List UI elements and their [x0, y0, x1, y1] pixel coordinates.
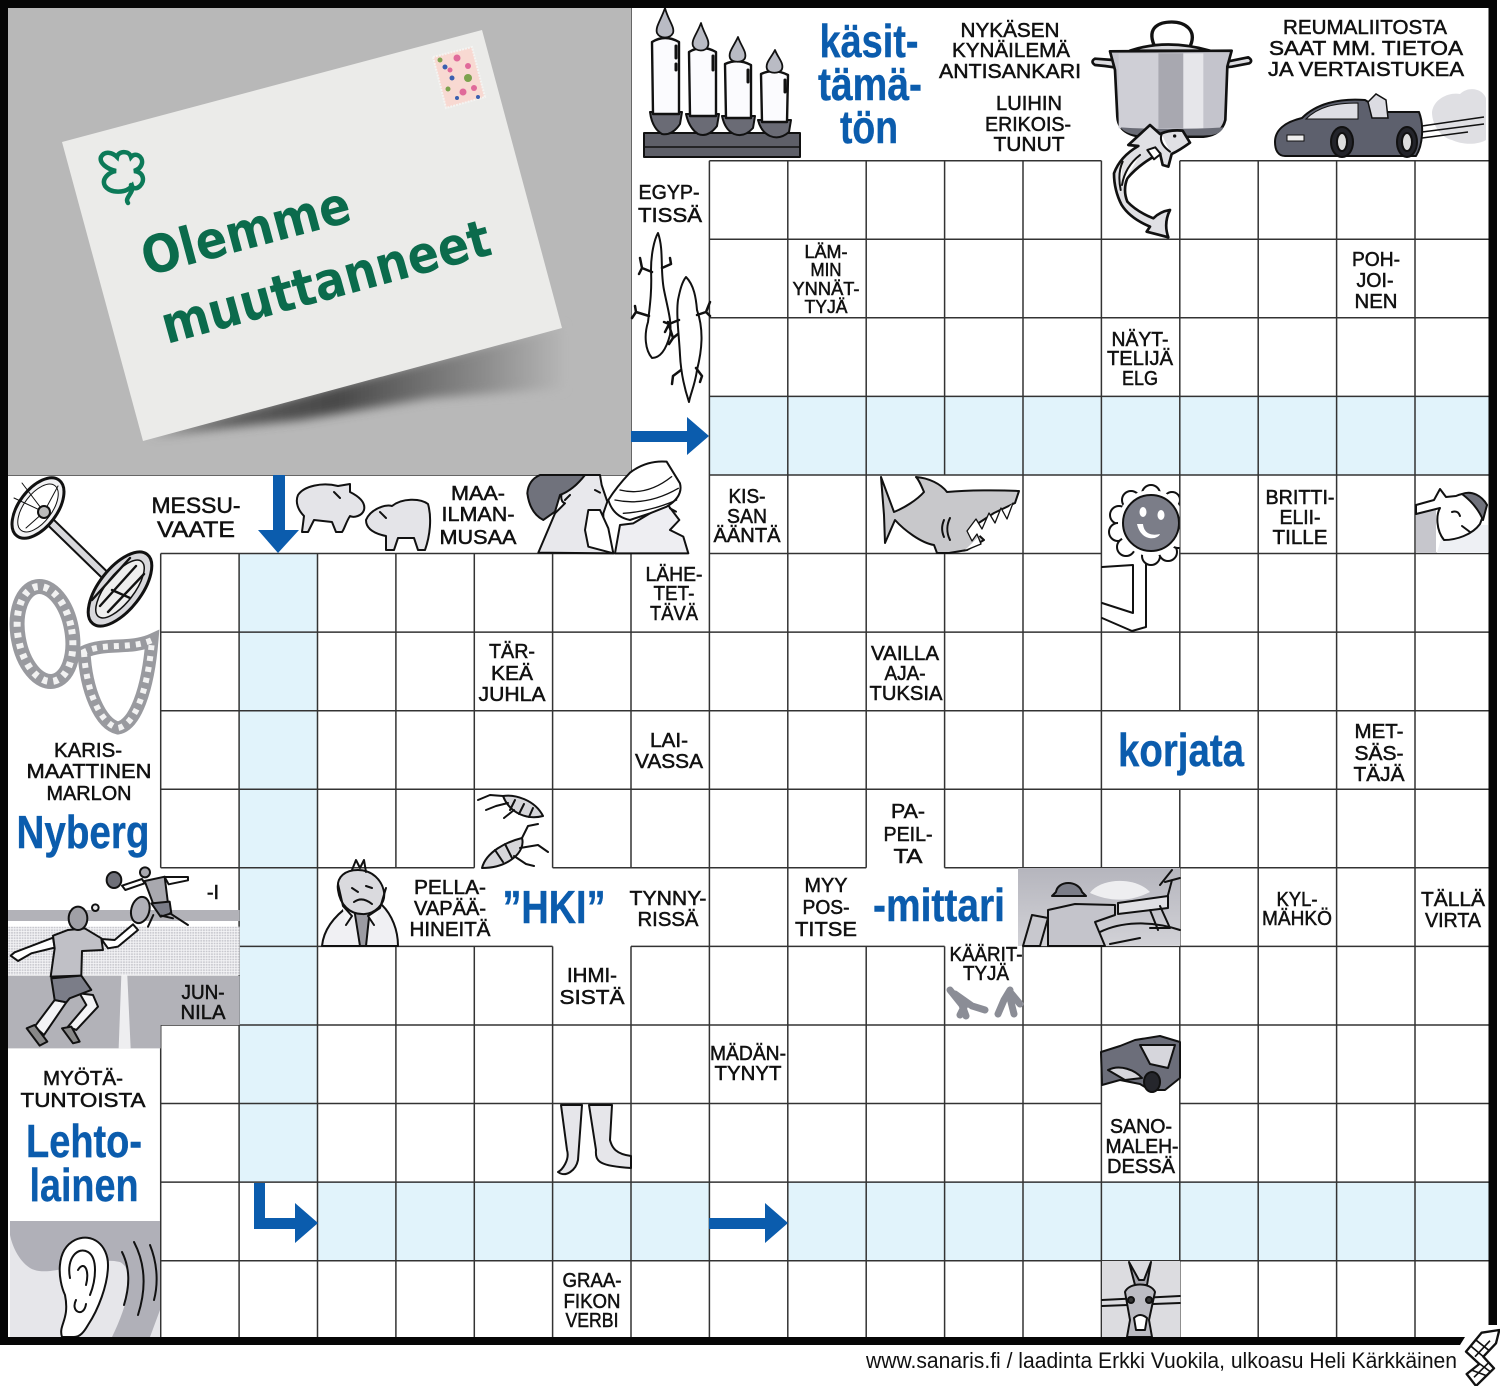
clue: sanomalehdessä: [1106, 1116, 1178, 1178]
clue: tärkeä juhla: TÄR-: [489, 641, 535, 663]
blue word: Lehtolainen: Lehto-: [26, 1115, 142, 1167]
clue: graafikon verbi: VERBI: [566, 1310, 618, 1332]
clue: messuvaate: MESSU-: [152, 493, 240, 518]
clue: mädäntynyt: MÄDÄN-: [710, 1043, 786, 1065]
icon: clover logo: [101, 152, 143, 203]
clue: vailla ajatuksia: AJA-: [884, 663, 926, 685]
clue: laivassa: LAI-: [650, 730, 688, 752]
icon: worried old man: [322, 860, 398, 946]
clue: tärkeä juhla: KEÄ: [491, 663, 534, 685]
clue: messuvaate: [152, 493, 240, 542]
panel: moving announcement card: [8, 8, 631, 475]
clue: pellavapäähineitä: HINEITÄ: [410, 919, 491, 941]
icon: legs: [558, 1105, 631, 1174]
icon: donkey: [1102, 1261, 1180, 1337]
clue: käärittyjä: [950, 944, 1022, 985]
headline on card: Olemme: [135, 175, 357, 289]
clue: metsästäjä: [1354, 721, 1405, 786]
icon: sports car with smoke: [1275, 89, 1486, 157]
clue: tällä virta: [1421, 889, 1486, 932]
icon: cooking pot: [1092, 22, 1251, 137]
clue: karismaattinen marlon: MARLON: [46, 783, 132, 805]
blue word: käsittämätön: tön: [840, 101, 898, 153]
clue: ihmisistä: [560, 965, 625, 1009]
clue: laivassa: VASSA: [635, 751, 704, 773]
blue word: Lehtolainen: lainen: [30, 1159, 138, 1211]
clue: luihin erikoistunut: [985, 93, 1071, 156]
clue: pellavapäähineitä: [410, 877, 491, 941]
clue: metsästäjä: MET-: [1354, 721, 1404, 743]
clue: karismaattinen marlon: MAATTINEN: [26, 761, 152, 783]
clue: reumaliitosta: SAAT MM. TIETOA: [1269, 38, 1464, 60]
clue: sanomalehdessä: DESSÄ: [1107, 1156, 1176, 1178]
clue: pellavapäähineitä: VAPÄÄ-: [414, 898, 486, 920]
clue: lämmin ynnättyjä: YNNÄT-: [792, 279, 860, 299]
clue: karismaattinen marlon: [26, 740, 152, 805]
clue: näyttelijä elg: TELIJÄ: [1107, 348, 1174, 370]
icon: two lice: [478, 795, 548, 868]
clue: pohjoinen: NEN: [1354, 291, 1398, 313]
clue: lähetettävä: [646, 564, 702, 625]
clue: -I: -I: [207, 882, 219, 904]
clue: pohjoinen: POH-: [1352, 249, 1400, 271]
clue: tynnyrissä: RISSÄ: [638, 909, 699, 931]
icon: sleeping person: [1416, 489, 1488, 553]
icon: two lizards: [632, 233, 710, 402]
clue: sanomalehdessä: MALEH-: [1106, 1136, 1178, 1158]
clue: laivassa: [635, 730, 704, 773]
clue: sanomalehdessä: SANO-: [1110, 1116, 1172, 1138]
clue: britti-eliitille: TILLE: [1272, 527, 1328, 549]
clue: egyptissä: EGYP-: [638, 182, 700, 204]
clue: graafikon verbi: [562, 1270, 622, 1332]
clue: lämmin ynnättyjä: [792, 242, 860, 317]
clue: myötätuntoista: TUNTOISTA: [20, 1090, 146, 1112]
clue: pellavapäähineitä: PELLA-: [414, 877, 486, 899]
clue: vailla ajatuksia: [870, 643, 943, 705]
clue: mädäntynyt: TYNYT: [714, 1063, 782, 1085]
headline on card: muuttanneet: [155, 209, 497, 357]
clue: pohjoinen: JOI-: [1356, 270, 1394, 292]
clue: mädäntynyt: [710, 1043, 786, 1085]
blue word: Nyberg: Nyberg: [16, 806, 150, 858]
icon: flower wreaths: [10, 582, 152, 728]
clue: ihmisistä: SISTÄ: [560, 987, 625, 1009]
clue: lämmin ynnättyjä: LÄM-: [804, 242, 848, 262]
icon: advent candles: [644, 8, 800, 157]
clue: tällä virta: VIRTA: [1425, 910, 1482, 932]
icon: whispering women: [527, 461, 688, 553]
clue: kissan ääntä: ÄÄNTÄ: [714, 525, 781, 547]
clue: pohjoinen: [1352, 249, 1400, 313]
clue: kissan ääntä: SAN: [727, 506, 767, 528]
clue: junnila: NILA: [180, 1002, 226, 1024]
clue: kylmähkö: KYL-: [1276, 889, 1318, 911]
clue: papeilta: PEIL-: [884, 824, 932, 846]
icon: wrecked car: [1101, 1036, 1180, 1092]
footer credit: www.sanaris.fi / laadinta Erkki Vuokila, ulkoasu Heli Kärkkäinen: [865, 1348, 1457, 1373]
blue word: korjata: korjata: [1118, 724, 1244, 776]
icon: wheel barbell: [2, 469, 164, 637]
clue: käärittyjä: KÄÄRIT-: [950, 944, 1022, 966]
clue: luihin erikoistunut: ERIKOIS-: [985, 114, 1071, 136]
blue word: Lehtolainen: [26, 1115, 142, 1211]
icon: badminton players over net: [8, 867, 240, 1048]
clue: tärkeä juhla: [478, 641, 546, 706]
clue: reumaliitosta: JA VERTAISTUKEA: [1268, 59, 1465, 81]
clue: tällä virta: TÄLLÄ: [1421, 889, 1486, 911]
clue: lämmin ynnättyjä: MIN: [810, 260, 842, 280]
clue: lämmin ynnättyjä: TYJÄ: [804, 297, 848, 317]
clue: kylmähkö: MÄHKÖ: [1262, 908, 1332, 930]
icon: shark: [881, 477, 1019, 553]
clue: maailmanmusaa: MUSAA: [440, 527, 517, 549]
clue: myy postitse: TITSE: [795, 919, 857, 941]
clue: tynnyrissä: [630, 888, 706, 931]
clue: näyttelijä elg: [1107, 329, 1174, 390]
icon: salmon: [1114, 125, 1190, 237]
clue: metsästäjä: TÄJÄ: [1354, 764, 1405, 786]
clue: vailla ajatuksia: TUKSIA: [870, 683, 943, 705]
clue: kissan ääntä: [714, 486, 781, 547]
clue: britti-eliitille: ELII-: [1280, 507, 1320, 529]
icon: ear: [10, 1221, 160, 1337]
blue highlight rows and column: [239, 396, 1489, 1261]
clue: lähetettävä: LÄHE-: [646, 564, 702, 586]
arrow: solution row continues: [709, 1203, 788, 1243]
clue: maailmanmusaa: MAA-: [451, 483, 505, 505]
clue: egyptissä: TISSÄ: [638, 205, 703, 227]
clue: maailmanmusaa: [440, 483, 517, 549]
clue: junnila: JUN-: [182, 982, 224, 1004]
clue: nykäsen kynäilemä antisankari: [939, 20, 1081, 83]
clue: myy postitse: POS-: [802, 897, 850, 919]
clue: britti-eliitille: BRITTI-: [1266, 487, 1334, 509]
clue: myy postitse: MYY: [804, 875, 848, 897]
clue: ihmisistä: IHMI-: [567, 965, 617, 987]
clue: britti-eliitille: [1266, 487, 1334, 549]
clue: nykäsen kynäilemä antisankari: KYNÄILEMÄ: [952, 40, 1071, 62]
clue: käärittyjä: TYJÄ: [963, 963, 1010, 985]
icon: soldier with rifle: [1018, 868, 1180, 946]
icon: lattice pencil logo: [1466, 1330, 1499, 1386]
clue: lähetettävä: TÄVÄ: [650, 603, 699, 625]
arrow: elbow into solution row: [254, 1183, 318, 1243]
blue word: HKI: ”HKI”: [502, 881, 606, 933]
clue: lähetettävä: TET-: [654, 583, 694, 605]
clue: kylmähkö: [1262, 889, 1332, 930]
clue: papeilta: PA-: [891, 801, 925, 823]
clue: papeilta: TA: [894, 846, 923, 868]
clue: tärkeä juhla: JUHLA: [478, 684, 546, 706]
arrow: down solution column: [258, 475, 299, 553]
clue: reumaliitosta: [1268, 17, 1465, 81]
icon: two pigs: [297, 484, 430, 550]
clue: nykäsen kynäilemä antisankari: NYKÄSEN: [960, 20, 1060, 42]
clue: vailla ajatuksia: VAILLA: [871, 643, 940, 665]
clue: metsästäjä: SÄS-: [1354, 743, 1404, 765]
clue: luihin erikoistunut: LUIHIN: [996, 93, 1062, 115]
clue: myötätuntoista: [20, 1068, 146, 1112]
blue word: -mittari: -mittari: [873, 879, 1005, 931]
blue word: käsittämätön: tämä-: [818, 58, 922, 110]
clue: karismaattinen marlon: KARIS-: [54, 740, 122, 762]
clue: egyptissä: [638, 182, 703, 227]
icon: flower person: [1102, 485, 1186, 631]
clue: kissan ääntä: KIS-: [728, 486, 766, 508]
clue: näyttelijä elg: NÄYT-: [1112, 329, 1168, 351]
blue word: käsittämätön: käsit-: [820, 15, 918, 67]
clue: nykäsen kynäilemä antisankari: ANTISANKARI: [939, 61, 1081, 83]
clue: junnila: [180, 982, 226, 1024]
clue: graafikon verbi: GRAA-: [562, 1270, 622, 1292]
blue word: käsittämätön: [818, 15, 922, 153]
clue: luihin erikoistunut: TUNUT: [994, 134, 1064, 156]
icon: postage stamp: [433, 47, 485, 108]
icon: small gray figures: [950, 990, 1020, 1016]
clue: myy postitse: [795, 875, 857, 941]
clue: messuvaate: VAATE: [157, 517, 235, 542]
clue: maailmanmusaa: ILMAN-: [442, 504, 514, 526]
clue: papeilta: [884, 801, 932, 868]
clue: reumaliitosta: REUMALIITOSTA: [1283, 17, 1448, 39]
clue: näyttelijä elg: ELG: [1122, 368, 1158, 390]
clue: tynnyrissä: TYNNY-: [630, 888, 706, 910]
clue: graafikon verbi: FIKON: [564, 1291, 620, 1313]
arrow: main solution row: [631, 417, 709, 455]
clue: myötätuntoista: MYÖTÄ-: [43, 1068, 123, 1090]
